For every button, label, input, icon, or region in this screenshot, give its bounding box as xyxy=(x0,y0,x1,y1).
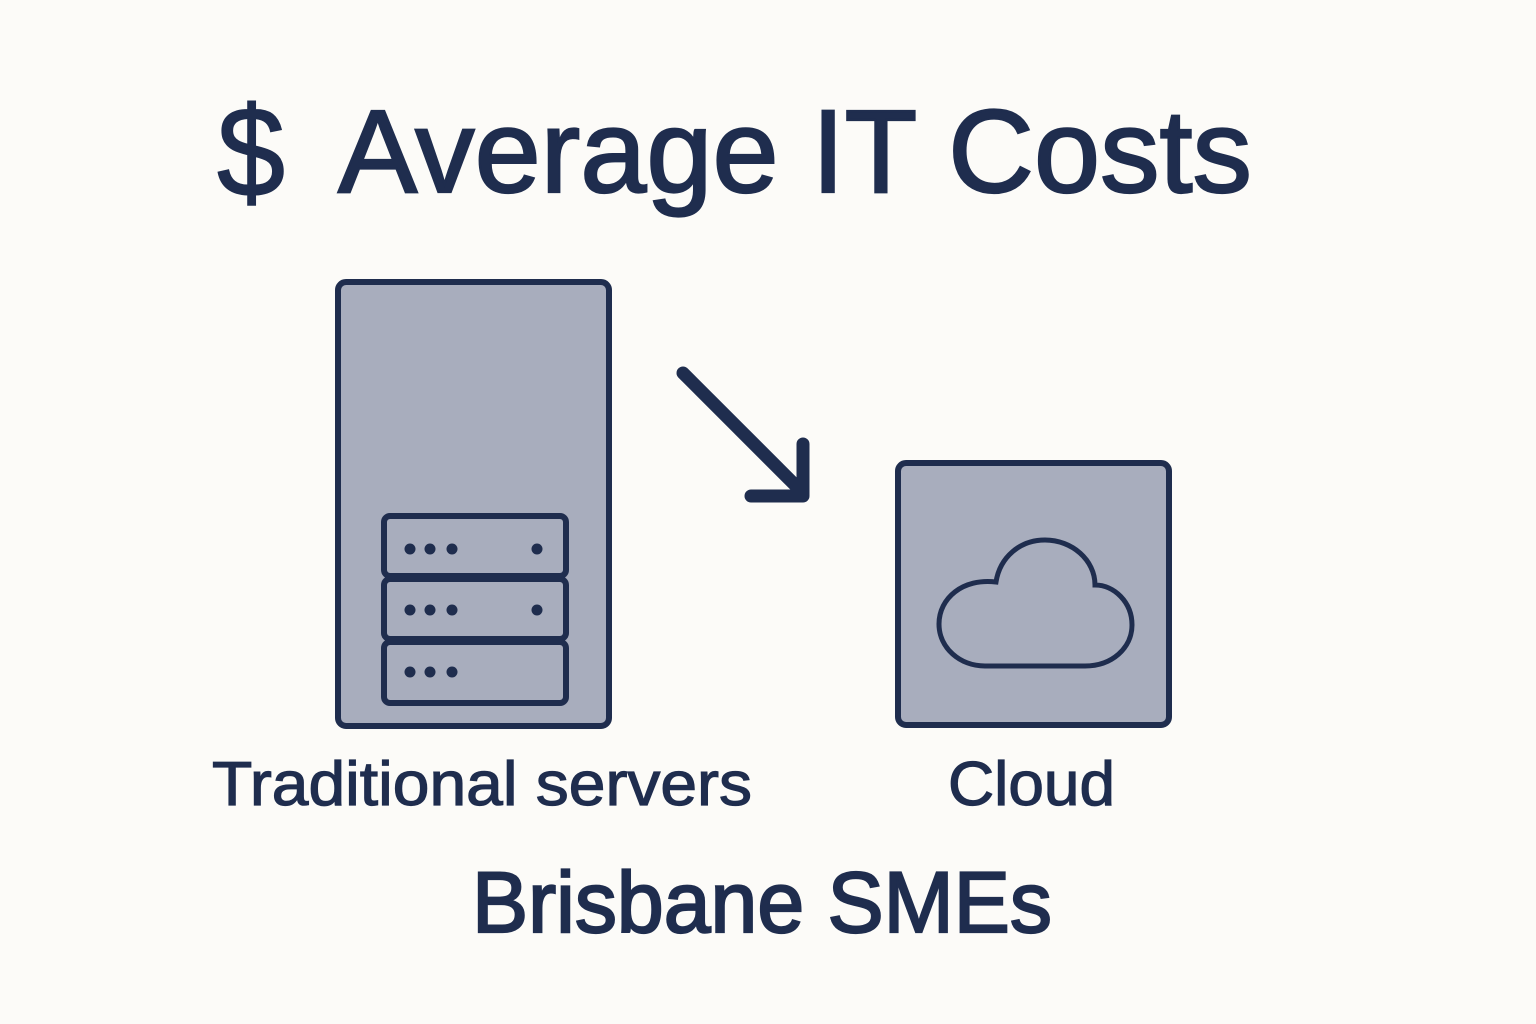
label: traditional servers: Traditional servers xyxy=(212,750,752,819)
title: Average IT Costs xyxy=(338,86,1252,218)
label: cloud: Cloud xyxy=(948,750,1115,819)
icon: cloud xyxy=(939,540,1132,666)
arrow: decreasing cost xyxy=(683,373,803,496)
title: $ xyxy=(217,81,285,224)
icon: server stack xyxy=(384,516,566,703)
panel: cloud xyxy=(898,463,1169,725)
panel: traditional servers xyxy=(338,282,609,726)
subtitle: Brisbane SMEs xyxy=(472,855,1052,951)
